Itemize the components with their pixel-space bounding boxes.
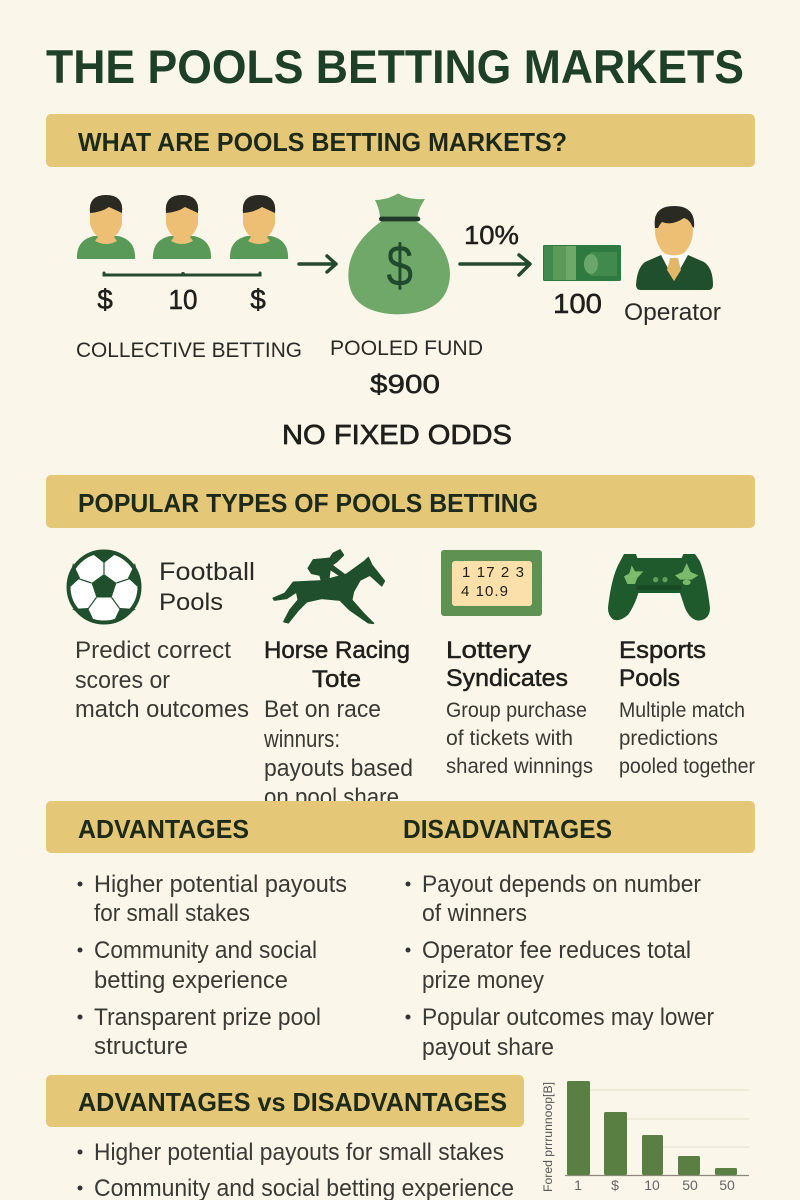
panel: popular types <box>46 475 755 811</box>
list: disadvantages <box>406 871 714 1061</box>
amount: 100: 100 <box>553 288 602 319</box>
text: lottery syndicates: of tickets with <box>446 727 573 750</box>
text: football pools: scores or <box>75 667 170 694</box>
list: advantages: Transparent prize pool <box>94 1004 321 1031</box>
list: advantages: Higher potential payouts <box>94 871 347 898</box>
text: lottery syndicates: shared winnings <box>446 755 593 778</box>
text: esports pools: Multiple match <box>619 699 745 722</box>
list: advantages: Community and social <box>94 937 317 964</box>
operator fee arrow: 10% <box>464 220 519 250</box>
text: football pools: Football <box>159 558 255 586</box>
bar chart <box>543 1081 749 1193</box>
label: collective betting: COLLECTIVE BETTING <box>76 339 302 362</box>
icon: lottery ticket: 1 17 2 3 <box>462 564 524 581</box>
text: lottery syndicates: Group purchase <box>446 699 587 722</box>
bracket with stake labels: $ <box>97 284 113 315</box>
heading bar: advantages vs disadvantages <box>46 1075 524 1127</box>
label: pooled fund: POOLED FUND <box>330 337 483 360</box>
text: esports pools: predictions <box>619 727 718 750</box>
text: football pools: Predict correct <box>75 637 231 664</box>
text: esports pools: pooled together <box>619 755 755 778</box>
bracket with stake labels <box>97 272 266 315</box>
icon: three bettors <box>77 195 288 259</box>
list: advantages: structure <box>94 1033 188 1060</box>
list: disadvantages: prize money <box>422 967 544 994</box>
text: lottery syndicates: Syndicates <box>446 665 568 692</box>
heading bar: advantages and disadvantages <box>46 801 755 853</box>
list: summary: Higher potential payouts for small stakes <box>94 1139 504 1166</box>
bar chart: $ <box>611 1177 619 1193</box>
icon: football <box>67 552 141 623</box>
arrow to pool <box>299 256 336 272</box>
list: advantages <box>78 871 347 1060</box>
list: summary <box>78 1139 514 1200</box>
icon: banknote <box>543 245 621 281</box>
list: advantages: betting experience <box>94 967 288 994</box>
text: esports pools: Pools <box>619 665 680 692</box>
text: horse racing tote: winnurs: <box>263 726 340 753</box>
heading bar: advantages and disadvantages: ADVANTAGES <box>78 814 249 844</box>
icon: game controller <box>608 554 710 621</box>
list: disadvantages: Popular outcomes may lower <box>422 1004 714 1031</box>
bar chart: 50 <box>682 1177 698 1193</box>
panel: advantages vs disadvantages <box>46 1075 524 1200</box>
panel: what are pools betting markets <box>46 114 755 450</box>
label: operator: Operator <box>624 299 721 326</box>
text: horse racing tote: payouts based <box>264 755 413 782</box>
label: pooled fund <box>330 337 483 399</box>
heading bar: what are pools: WHAT ARE POOLS BETTING MARKETS? <box>78 127 567 157</box>
title: THE POOLS BETTING MARKETS <box>46 40 744 93</box>
icon: lottery ticket: 4 10.9 <box>461 583 508 600</box>
bar chart: 10 <box>644 1177 660 1193</box>
list: disadvantages: Operator fee reduces total <box>422 937 691 964</box>
callout: no fixed odds: NO FIXED ODDS <box>282 419 512 450</box>
heading bar: what are pools <box>46 114 755 167</box>
list: disadvantages: payout share <box>422 1034 554 1061</box>
bar chart: 50 <box>719 1177 735 1193</box>
bar chart: 1 <box>574 1177 582 1193</box>
bar chart: Fored prrrunnoop[B] <box>543 1082 555 1192</box>
heading bar: advantages vs disadvantages: ADVANTAGES vs DISADVANTAGES <box>78 1087 507 1117</box>
icon: money bag: $ <box>386 234 413 299</box>
text: football pools <box>75 558 255 723</box>
heading bar: popular types <box>46 475 755 528</box>
panel: advantages and disadvantages <box>46 801 755 1061</box>
text: esports pools: Esports <box>619 637 706 664</box>
heading bar: popular types: POPULAR TYPES OF POOLS BETTING <box>78 488 538 518</box>
text: esports pools <box>619 637 755 778</box>
text: lottery syndicates <box>446 637 593 778</box>
icon: money bag <box>348 193 450 314</box>
text: football pools: Pools <box>159 589 223 616</box>
icon: lottery ticket <box>441 550 542 616</box>
operator fee arrow <box>460 220 530 275</box>
text: football pools: match outcomes <box>75 696 249 723</box>
bracket with stake labels: 10 <box>168 284 198 315</box>
text: horse racing tote: Horse Racing <box>264 637 410 664</box>
label: pooled fund: $900 <box>370 369 440 399</box>
icon: operator <box>636 206 713 290</box>
text: lottery syndicates: Lottery <box>446 637 531 664</box>
icon: racehorse <box>273 550 384 623</box>
text: horse racing tote: on pool share <box>264 784 399 811</box>
list: advantages: for small stakes <box>94 900 250 927</box>
bracket with stake labels: $ <box>250 284 266 315</box>
text: horse racing tote <box>263 637 413 811</box>
heading bar: advantages and disadvantages: DISADVANTAGES <box>403 814 612 844</box>
text: horse racing tote: Bet on race <box>264 696 381 723</box>
list: disadvantages: Payout depends on number <box>422 871 701 898</box>
list: disadvantages: of winners <box>422 900 527 927</box>
text: horse racing tote: Tote <box>312 666 361 693</box>
